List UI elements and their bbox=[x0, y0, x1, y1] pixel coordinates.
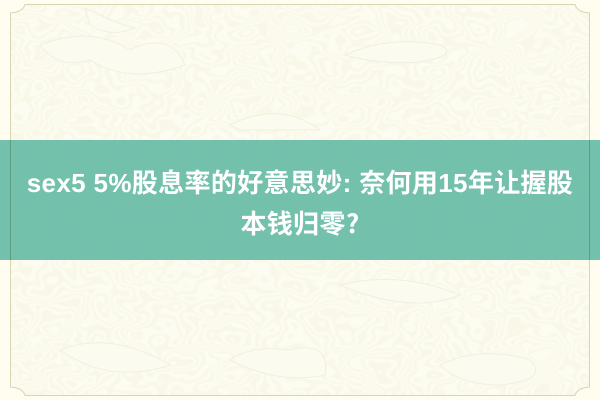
title text: 本钱归零? bbox=[240, 204, 360, 240]
title text bbox=[27, 168, 573, 240]
title text: sex5 5%股息率的好意思妙: 奈何用15年让握股 bbox=[27, 168, 573, 198]
title banner bbox=[0, 140, 600, 260]
